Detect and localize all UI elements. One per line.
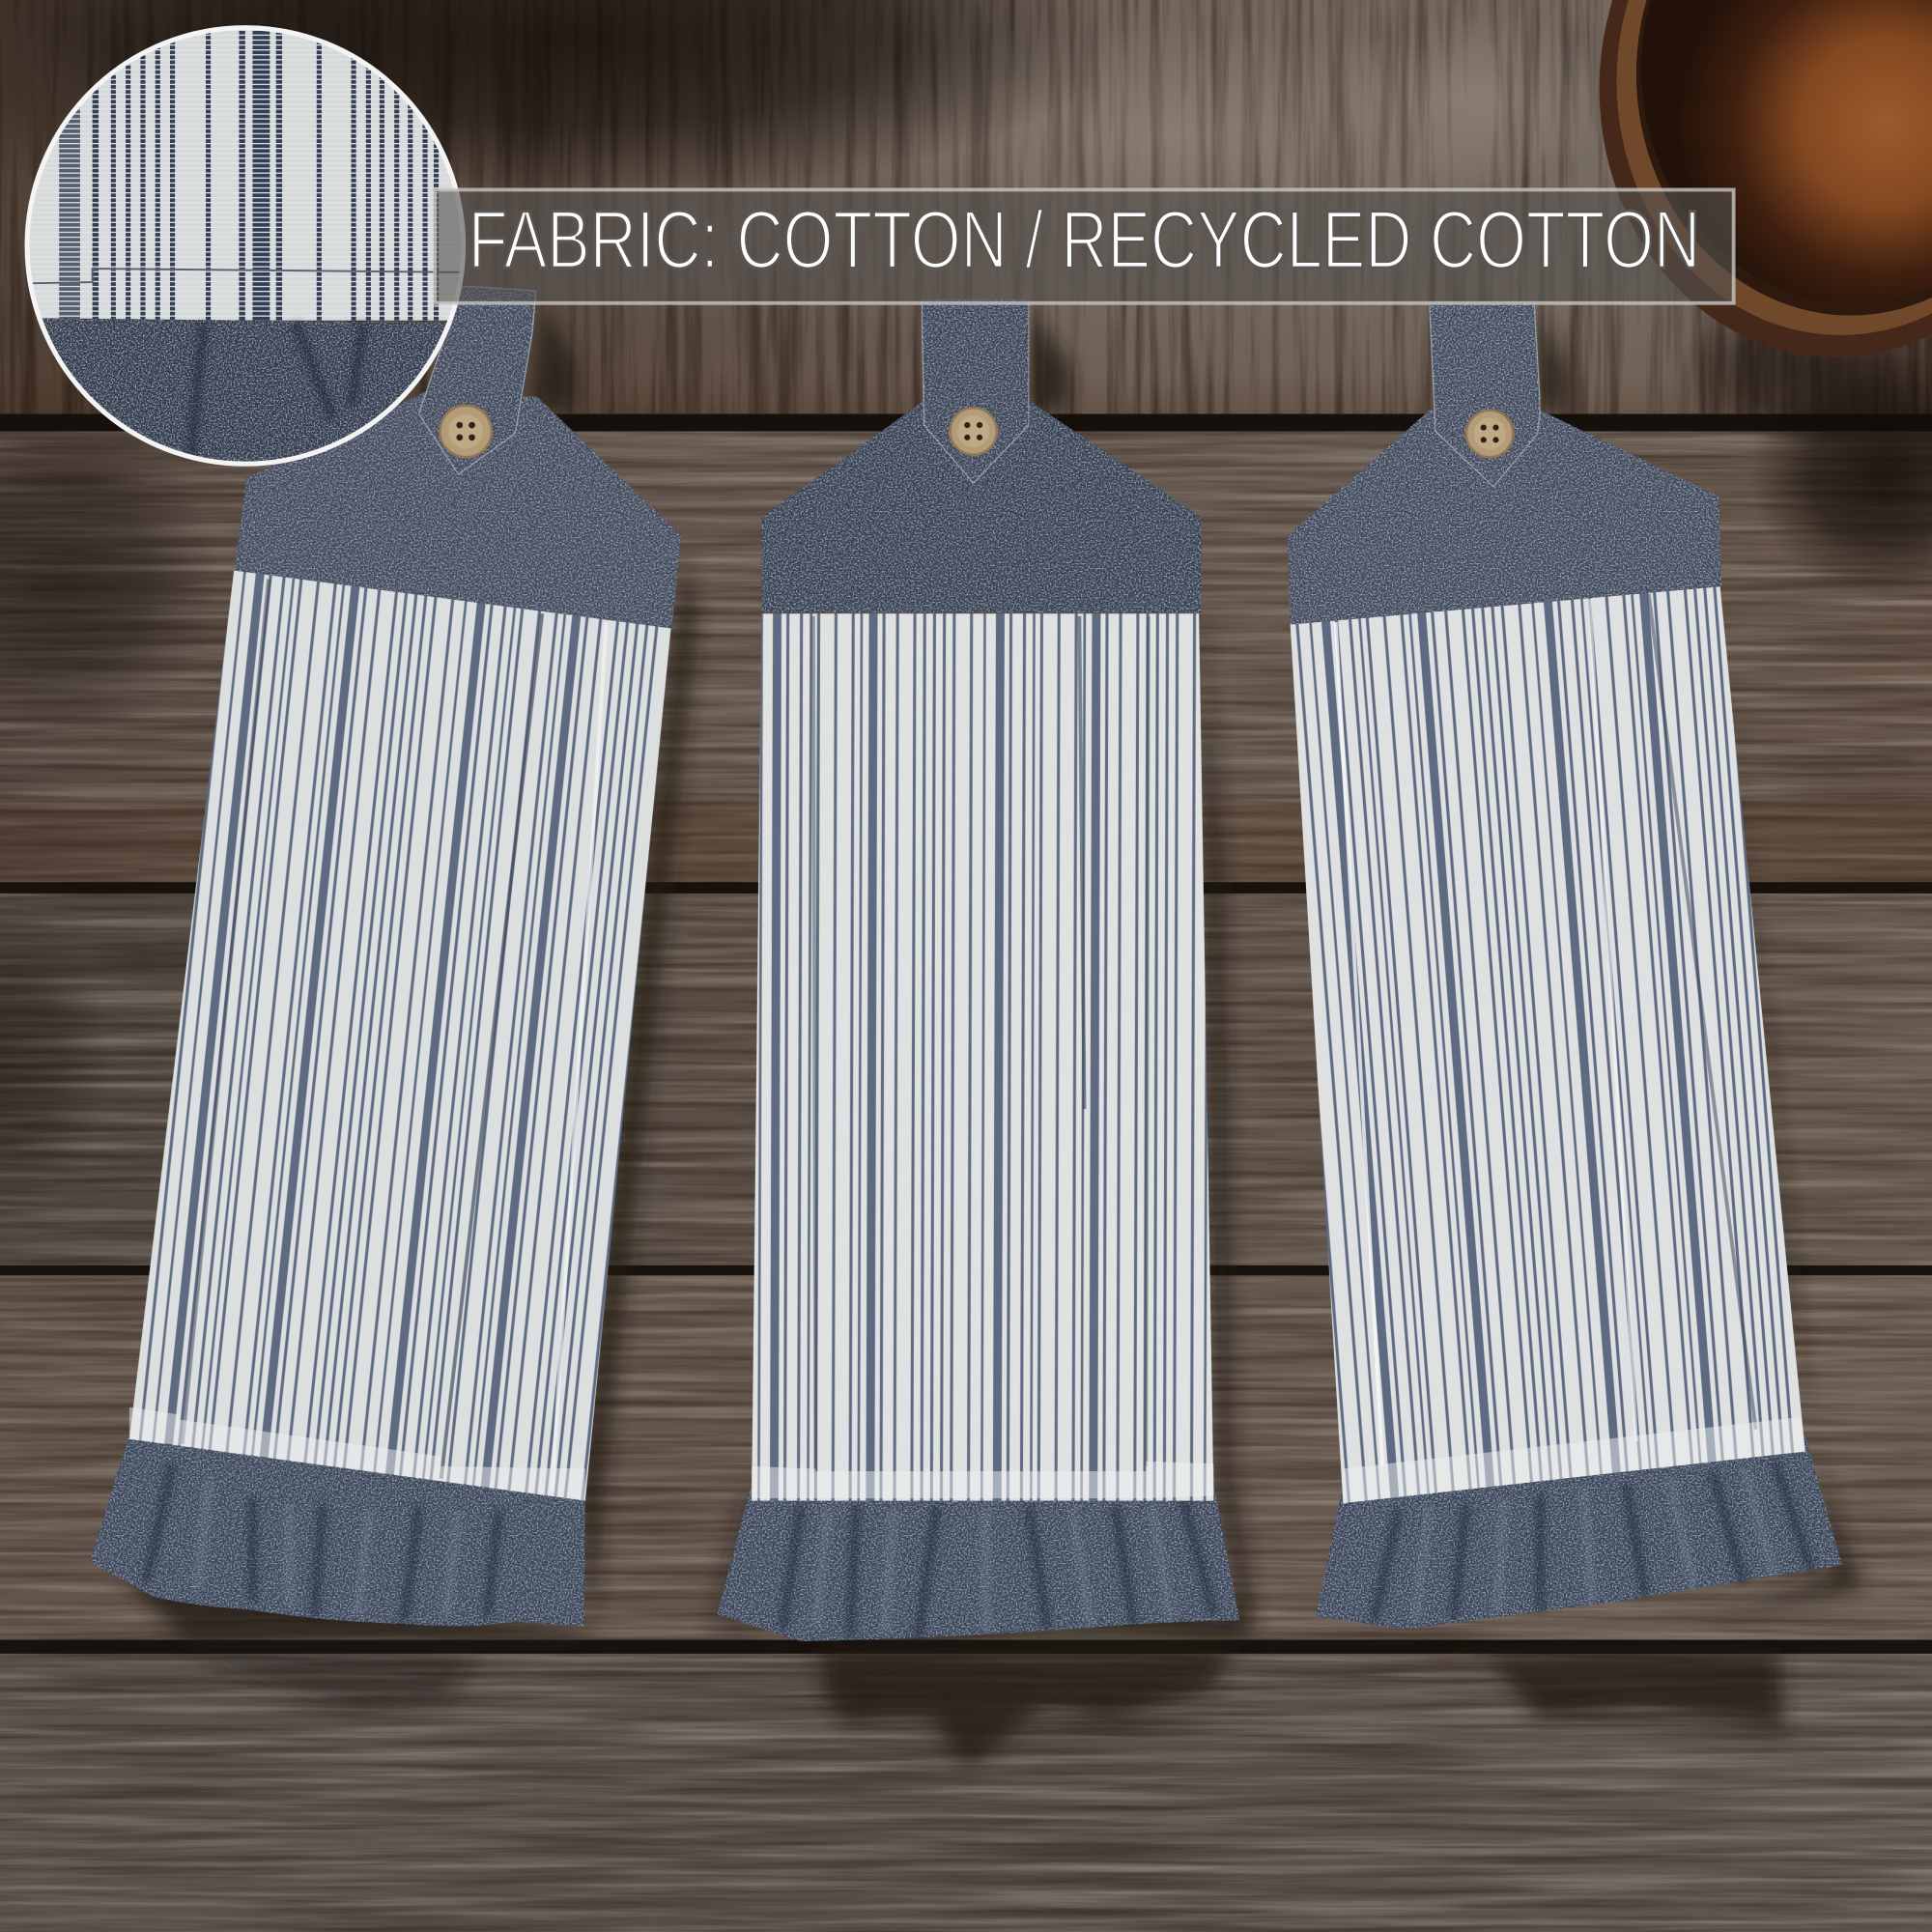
- fabric detail lens: [25, 25, 469, 469]
- towel 1 pleats: [183, 579, 607, 1491]
- bowl: [1600, 0, 1932, 357]
- towel 2 ruffle: [717, 1485, 1239, 1641]
- towel 3 head panel: [1288, 411, 1721, 625]
- towel 1 ruffle: [90, 1430, 585, 1627]
- towel 3 striped body: [1290, 586, 1805, 1503]
- towel 2 (centre): [717, 299, 1239, 1641]
- towel 1 striped body: [129, 569, 671, 1501]
- towel 3 button: [1466, 411, 1513, 457]
- towel 1 flap: [419, 286, 536, 474]
- lens: striped fabric: [25, 25, 469, 321]
- towel 1 button: [440, 406, 492, 457]
- towel 3 (right): [1288, 301, 1842, 1629]
- light patch on top plank: [788, 13, 1638, 246]
- towel 2 pleats: [813, 616, 1149, 1472]
- towel 3 pleats: [1336, 594, 1756, 1466]
- banner: translucent label: [435, 189, 1734, 303]
- towel 2 flap: [922, 299, 1029, 483]
- towel 3 flap: [1430, 301, 1540, 487]
- towel 3 ruffle: [1316, 1435, 1842, 1629]
- towel 2 button: [950, 408, 997, 455]
- towel 1 bottom hem: [129, 1407, 585, 1501]
- towel 2 striped body: [752, 613, 1213, 1501]
- towel 1 (left): [90, 286, 681, 1627]
- towel 1 head panel: [234, 392, 681, 629]
- towel 3 bottom hem: [1343, 1417, 1805, 1503]
- lens: ruffle folds: [191, 323, 363, 456]
- shadows below towels: [117, 301, 1861, 1768]
- cast shadows on the wall: [0, 0, 1932, 1220]
- lens: chambray ruffle: [43, 318, 446, 462]
- towel 2 head panel: [761, 401, 1202, 612]
- towel 2 bottom hem: [752, 1462, 1213, 1498]
